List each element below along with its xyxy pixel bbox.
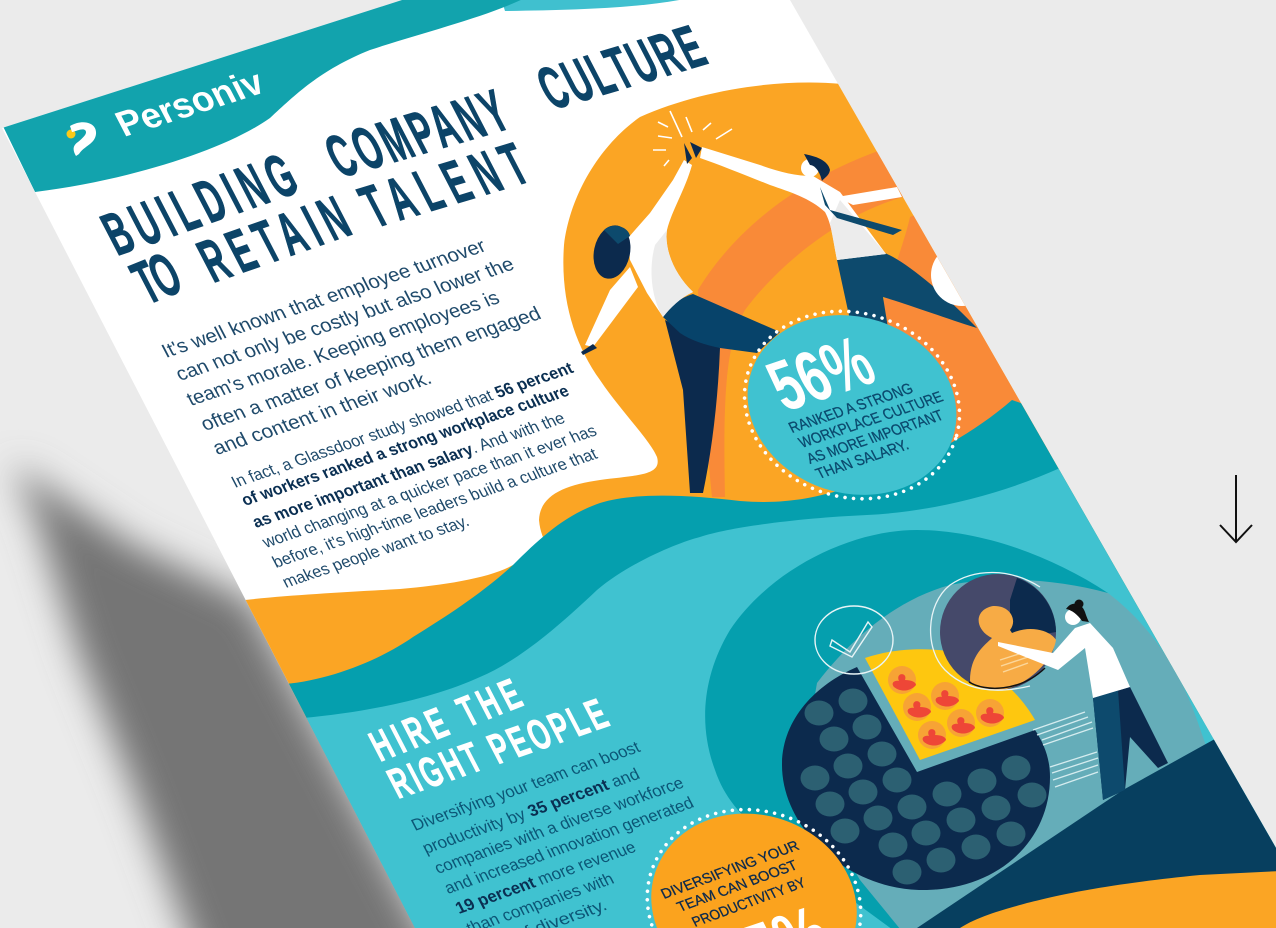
teal wave [285,400,1276,928]
title: CULTURE [526,13,716,122]
intro paragraph: often a matter of keeping them engaged [197,303,545,435]
title: TALENT [349,130,539,240]
figure: man [690,142,993,328]
heading: hire the right people: RIGHT PEOPLE [379,689,616,808]
callout: 56%: RANKED A STRONG [786,381,916,437]
intro paragraph: can not only be costly but also lower the [172,254,518,385]
glassdoor paragraph: In fact, a Glassdoor study showed that 56 percent [228,359,577,492]
glassdoor paragraph: as more important than salary. And with the [249,409,568,532]
intro paragraph [158,235,545,459]
glassdoor paragraph: world changing at a quicker pace than it ever has [258,421,600,552]
logo: Personiv: Personiv [109,62,271,144]
callout: 56%: 56% [754,321,887,426]
hire paragraph: 19 percent more revenue [452,838,639,918]
avatar dots [800,688,1046,884]
illustration backdrop: dark teal shape [705,530,1108,928]
hire paragraph: Diversifying your team can boost [408,738,643,835]
glassdoor paragraph [228,359,601,592]
ground [917,740,1276,928]
orange blob and wave [245,82,1276,720]
icon: check circle [815,606,893,674]
yellow pie slice [865,649,1035,760]
icon: down arrow [1220,475,1252,542]
ring arcs [931,572,1040,690]
glassdoor paragraph: before, it's high-time leaders build a culture that [269,444,601,572]
lower section light teal background [303,468,1276,928]
hire paragraph: and increased innovation generated [441,793,697,898]
figure: woman at pie [998,600,1168,800]
callout: 56% [742,309,962,501]
hire paragraph [408,738,697,928]
logo: Personiv [66,74,260,156]
callout: 35% [645,808,862,928]
big person circle [931,572,1056,690]
title [98,24,710,303]
intro paragraph: team's morale. Keeping employees is [183,287,503,410]
title: RETAIN [187,183,361,295]
glassdoor paragraph: of workers ranked a strong workplace culture [238,382,572,510]
intro paragraph: It's well known that employee turnover [158,235,490,362]
hire paragraph: companies with a diverse workforce [431,773,687,878]
figure: woman [581,143,780,493]
callout: 56%: WORKPLACE CULTURE [796,389,946,452]
glassdoor paragraph: makes people want to stay. [279,512,472,592]
title: BUILDING [91,141,308,268]
callout: 56%: THAN SALARY. [813,437,912,483]
pie chart of people [782,649,1050,890]
heading: hire the right people: HIRE THE [361,669,530,771]
speed lines [1033,712,1098,787]
callout: 35%: TEAM CAN BOOST [674,858,800,916]
callout: 56%: AS MORE IMPORTANT [804,407,947,468]
title: COMPANY [314,77,520,190]
callout: 35%: DIVERSIFYING YOUR [658,838,802,903]
hire paragraph: productivity by 35 percent and [419,765,643,858]
header band [0,0,690,192]
illustration: high five [581,111,993,493]
illustration backdrop: grey teal shape [800,580,1225,928]
intro paragraph: and content in their work. [209,368,435,459]
title: TO [121,239,192,317]
orange arc bands [698,152,1050,497]
drop shadow [12,464,450,928]
bottom orange wave [950,870,1276,928]
icon: logo mark [66,122,96,156]
sunburst lines [653,111,732,166]
